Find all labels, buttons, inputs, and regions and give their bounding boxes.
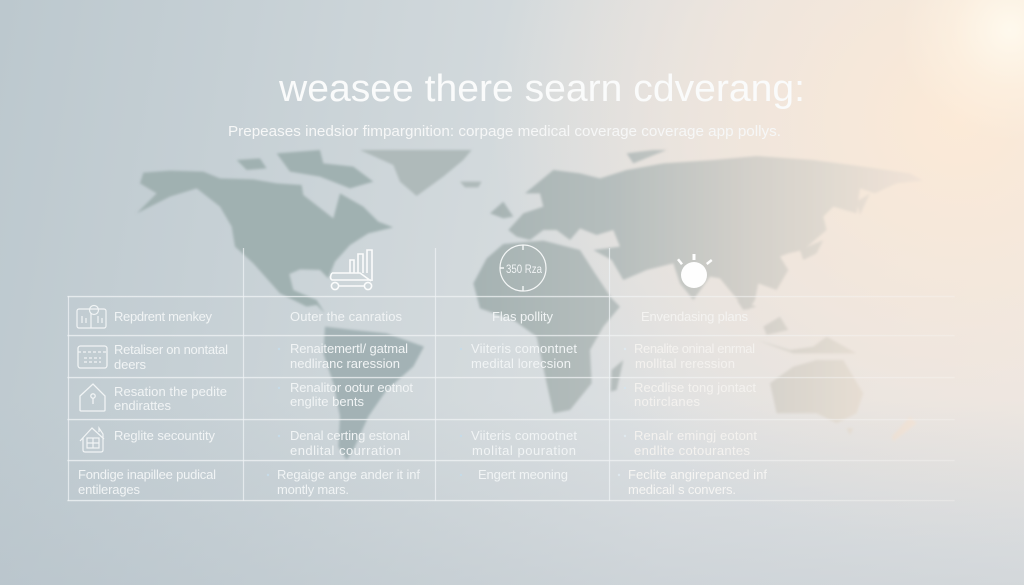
row 3 text: englite bents <box>290 394 364 409</box>
row 2 icon <box>78 346 107 368</box>
row 3 text: Resation the pedite <box>114 384 227 399</box>
icon: sun bulb <box>677 254 712 288</box>
row 3 text <box>114 380 756 413</box>
row 2 text: Renaitemertl/ gatmal <box>290 341 408 356</box>
row 2 text: Viiteris comontnet <box>471 341 577 356</box>
row 4 text: Reglite secountity <box>114 428 216 443</box>
icon: cart with bars <box>330 250 372 290</box>
row 2 text: medital lorecsion <box>471 356 571 371</box>
row 4 text: endlite cotourantes <box>634 443 750 458</box>
row 3 text: Renalitor ootur eotnot <box>290 380 413 395</box>
row 3 text: notirclanes <box>634 394 700 409</box>
map: Eurasia and Africa <box>473 150 923 442</box>
title: weasee there searn cdverang: <box>278 68 805 110</box>
row 2 text <box>114 341 755 372</box>
row 1 icon <box>77 306 106 328</box>
row 5 text <box>78 467 767 497</box>
icon: dial: 350 Rza <box>506 262 542 276</box>
row 5 text: medicail s convers. <box>628 482 736 497</box>
row 3 text: endirattes <box>114 398 172 413</box>
row 5 text: montly mars. <box>277 482 349 497</box>
row 4 text: Denal certing estonal <box>290 428 410 443</box>
row 2 text: Retaliser on nontatal <box>114 342 228 357</box>
row 5 text: Regaige ange ander it inf <box>277 467 420 482</box>
row 5 text: Fondige inapillee pudical <box>78 467 216 482</box>
row 1 header labels: Outer the canratios <box>290 309 402 324</box>
row 2 text: Renalite oninal enrmal <box>634 341 755 356</box>
row 4 text <box>114 428 757 458</box>
map: Americas <box>137 150 482 460</box>
row 1 header labels: Envendasing plans <box>641 309 748 324</box>
row 1 header labels: Repdrent menkey <box>114 309 212 324</box>
subtitle: Prepeases inedsior fimpargnition: corpage medical coverage coverage app pollys. <box>228 124 781 140</box>
row 4 text: Renalr emingj eotont <box>634 428 757 443</box>
map: Greenland <box>360 150 472 196</box>
row 4 text: endlital courration <box>290 443 401 458</box>
row 4 icon <box>80 428 104 452</box>
world map <box>137 150 923 460</box>
row 3 text: Recdlise tong jontact <box>634 380 756 395</box>
row 4 text: Viiteris comootnet <box>471 428 577 443</box>
row 2 text: deers <box>114 357 146 372</box>
icon: dial <box>500 245 546 291</box>
row 4 text: molital pouration <box>472 443 576 458</box>
row 3 icon <box>80 384 105 411</box>
row 2 text: nedliranc raression <box>290 356 400 371</box>
row 5 text: Feclite angirepanced inf <box>628 467 767 482</box>
row 5 text: Engert meoning <box>478 467 568 482</box>
row 5 text: entilerages <box>78 482 140 497</box>
table grid <box>68 248 954 501</box>
row 1 header labels: Flas pollity <box>492 309 554 324</box>
row 1 header labels <box>114 309 748 324</box>
row 2 text: mollital reression <box>635 356 735 371</box>
